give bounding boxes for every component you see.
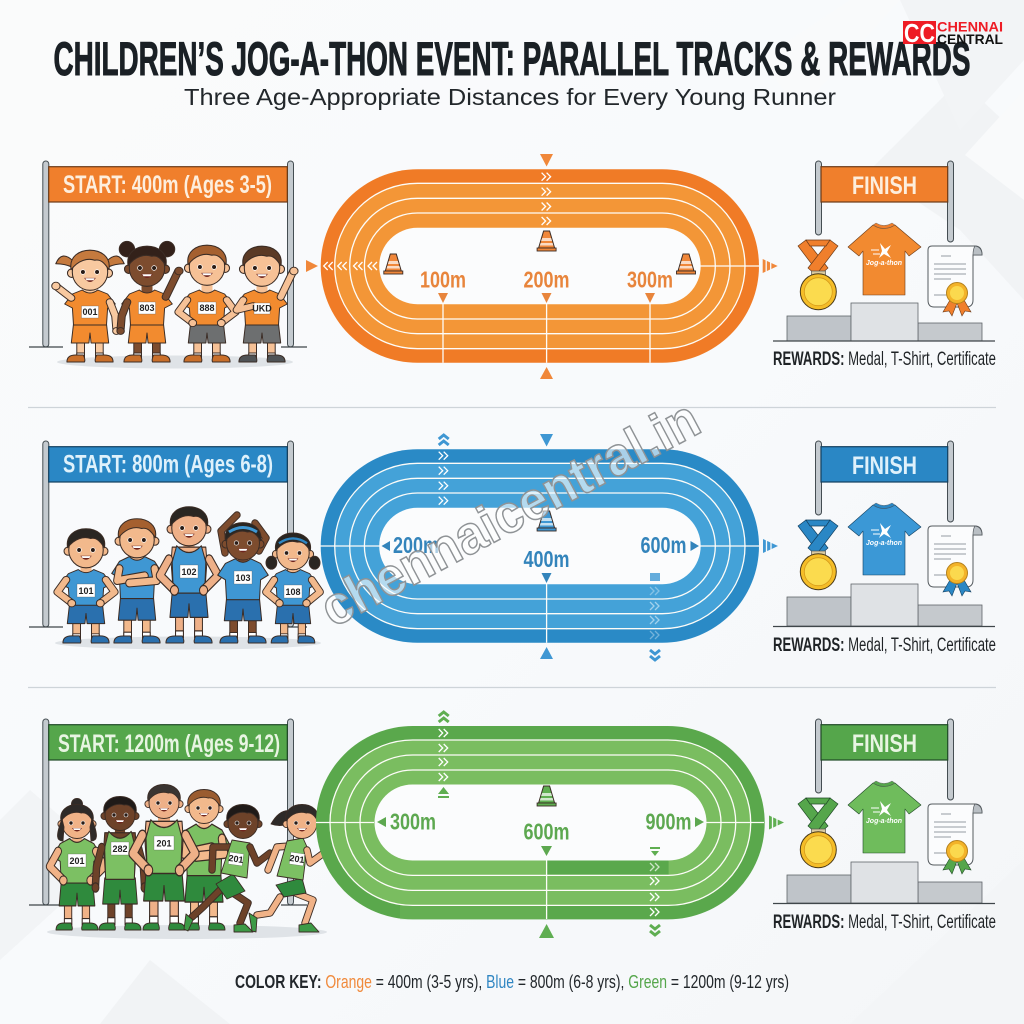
color key: COLOR KEY: Orange = 400m (3-5 yrs), Blue = 800m (6-8 yrs), Green = 1200m (9-12 yrs) bbox=[235, 971, 789, 992]
certificate bbox=[928, 804, 982, 874]
runner 204 arms crossed bbox=[178, 790, 230, 930]
track: 400m bbox=[321, 169, 759, 363]
medal bbox=[798, 520, 838, 590]
distance markers bbox=[382, 532, 699, 583]
start gate: 1200m bbox=[29, 719, 307, 905]
runner 001: 001 bbox=[82, 307, 98, 317]
distance markers bbox=[420, 266, 673, 303]
runner 282 bbox=[92, 796, 148, 930]
podium bbox=[773, 303, 995, 341]
runner 201 tall bbox=[133, 784, 195, 930]
divider bbox=[28, 686, 996, 688]
distance markers: 200m bbox=[393, 532, 439, 558]
start gate: 800m bbox=[29, 441, 307, 627]
runner 201 girl bbox=[50, 798, 104, 930]
runner 201 tall: 201 bbox=[156, 838, 172, 848]
distance markers: 200m bbox=[524, 266, 570, 292]
runner 102 bbox=[160, 507, 218, 643]
runners: ages 9-12 bbox=[47, 784, 328, 939]
certificate bbox=[928, 246, 982, 316]
logo: Chennai Central: CENTRAL bbox=[937, 31, 1003, 47]
running boy bbox=[184, 804, 270, 932]
runner 101 bbox=[57, 529, 115, 643]
runner 101: 101 bbox=[78, 586, 94, 596]
t-shirt bbox=[848, 503, 921, 575]
t-shirt bbox=[848, 781, 921, 853]
running girl: 201 bbox=[289, 853, 305, 865]
runner 201 girl: 201 bbox=[69, 856, 85, 866]
track: 1200m bbox=[316, 726, 765, 919]
medal bbox=[798, 240, 838, 310]
panel: 400m orange row bbox=[29, 154, 996, 379]
finish gate bbox=[816, 441, 954, 522]
runner 103 arm raised: 103 bbox=[235, 573, 251, 583]
t-shirt: Jog-a-thon bbox=[866, 540, 902, 547]
runner 803: 803 bbox=[139, 303, 155, 313]
runner 803 bbox=[117, 241, 183, 362]
logo: Chennai Central bbox=[903, 18, 1003, 48]
cones bbox=[384, 231, 696, 274]
runner 888 bbox=[178, 245, 236, 362]
distance markers: 300m bbox=[390, 808, 436, 834]
panel: 1200m green row bbox=[29, 712, 996, 939]
panel: 800m blue row bbox=[29, 434, 996, 660]
t-shirt: Jog-a-thon bbox=[866, 260, 902, 267]
cone bbox=[537, 511, 556, 531]
running boy: 201 bbox=[228, 853, 244, 865]
distance markers bbox=[377, 808, 704, 856]
distance markers: 600m bbox=[524, 818, 570, 844]
track: 800m bbox=[320, 449, 759, 643]
runners: ages 3-5 bbox=[52, 241, 298, 368]
runner 102: 102 bbox=[181, 567, 197, 577]
subtitle: Three Age-Appropriate Distances for Every Young Runner bbox=[184, 84, 836, 110]
runner arms crossed bbox=[112, 519, 162, 643]
t-shirt bbox=[848, 223, 921, 295]
start gate: 400m bbox=[29, 161, 307, 347]
distance markers: 300m bbox=[627, 266, 673, 292]
arrows around track bbox=[439, 434, 778, 660]
runner UKD bbox=[237, 246, 298, 362]
runners: ages 6-8 bbox=[55, 507, 321, 650]
runner UKD: UKD bbox=[252, 304, 272, 314]
start gate: 800m: START: 800m (Ages 6-8) bbox=[63, 451, 273, 479]
runner 108: 108 bbox=[285, 587, 301, 597]
distance markers: 600m bbox=[640, 532, 686, 558]
distance markers: 100m bbox=[420, 266, 466, 292]
divider bbox=[28, 406, 996, 408]
runner 282: 282 bbox=[112, 844, 128, 854]
medal bbox=[798, 798, 838, 868]
certificate bbox=[928, 526, 982, 596]
finish gate: FINISH bbox=[852, 172, 917, 200]
finish gate: FINISH bbox=[852, 452, 917, 480]
t-shirt: Jog-a-thon bbox=[866, 818, 902, 825]
podium bbox=[773, 862, 995, 904]
start gate: 1200m: START: 1200m (Ages 9-12) bbox=[58, 730, 280, 758]
distance markers: 400m bbox=[524, 546, 570, 572]
runner 103 arm raised bbox=[218, 515, 268, 643]
logo: Chennai Central: CHENNAI bbox=[937, 18, 1003, 34]
distance markers: 900m bbox=[646, 808, 692, 834]
podium bbox=[773, 584, 995, 626]
watermark: chennaicentral.in bbox=[310, 388, 709, 639]
runner 108 bbox=[266, 533, 320, 643]
finish gate bbox=[816, 719, 954, 800]
running girl bbox=[249, 804, 328, 932]
logo: Chennai Central: CC bbox=[904, 18, 935, 48]
finish gate: FINISH bbox=[852, 730, 917, 758]
runner 001 bbox=[52, 250, 124, 362]
arrows around track bbox=[438, 712, 784, 938]
arrows around track bbox=[306, 154, 778, 379]
cone bbox=[537, 786, 556, 806]
finish gate bbox=[816, 161, 954, 242]
runner 888: 888 bbox=[199, 303, 215, 313]
start gate: 400m: START: 400m (Ages 3-5) bbox=[63, 171, 272, 199]
